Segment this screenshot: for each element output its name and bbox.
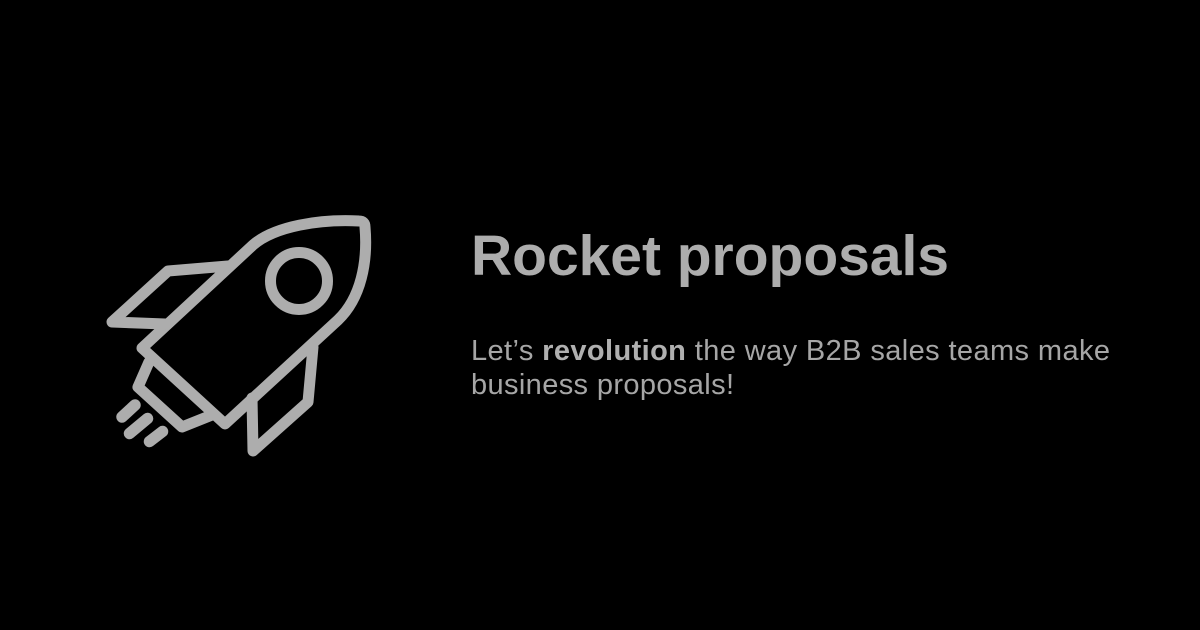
rocket upper fin: [112, 266, 228, 324]
icon: rocket: [112, 221, 366, 451]
rocket porthole: [270, 252, 328, 310]
title: Rocket proposals: [471, 224, 949, 288]
rocket nozzle: [138, 362, 212, 427]
rocket body: [142, 221, 366, 424]
rocket lower fin: [252, 347, 313, 451]
description line 2: business proposals!: [471, 369, 734, 401]
exhaust lines: [122, 405, 162, 442]
description line 1: Let’s revolution the way B2B sales teams make: [471, 335, 1110, 367]
description text: [471, 335, 1110, 401]
